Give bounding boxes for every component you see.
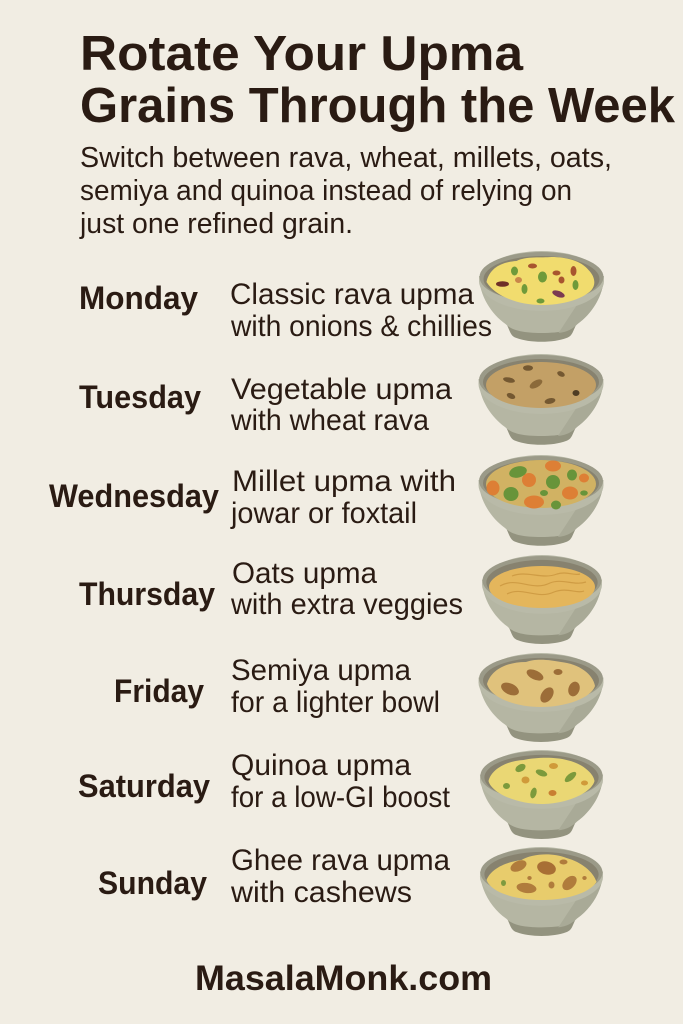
description: Tuesday: Vegetable upma: [231, 373, 452, 406]
description: Thursday: with extra veggies: [230, 588, 463, 621]
day label: Monday: Monday: [79, 280, 198, 316]
description: Wednesday: [230, 465, 456, 530]
row: Saturday: [78, 749, 603, 839]
title: [80, 27, 676, 133]
subtitle: just one refined grain.: [79, 208, 353, 240]
description: Thursday: [230, 557, 463, 621]
row: Friday: [114, 653, 604, 742]
title: Rotate Your Upma: [80, 27, 524, 81]
day label: Friday: Friday: [114, 673, 204, 709]
description: Saturday: Quinoa upma: [231, 749, 411, 782]
description: Saturday: [231, 749, 451, 814]
description: Friday: Semiya upma: [231, 654, 411, 687]
description: Sunday: Ghee rava upma: [231, 844, 450, 877]
subtitle: semiya and quinoa instead of relying on: [80, 175, 572, 207]
day label: Saturday: Saturday: [78, 768, 210, 804]
icon: bowl of wheat rava upma: [478, 354, 604, 445]
description: Saturday: for a low-GI boost: [231, 781, 451, 814]
day label: Sunday: Sunday: [98, 865, 207, 901]
description: Friday: for a lighter bowl: [231, 686, 440, 719]
day label: Tuesday: Tuesday: [79, 379, 201, 415]
subtitle: [79, 142, 612, 240]
icon: bowl of oats upma: [482, 555, 602, 644]
description: Sunday: [230, 844, 450, 909]
description: Friday: [231, 654, 440, 719]
icon: bowl of ghee rava upma with cashews: [480, 847, 603, 936]
row: Sunday: [98, 844, 603, 936]
description: Sunday: with cashews: [230, 876, 412, 909]
description: Tuesday: [230, 373, 452, 437]
row: Thursday: [79, 555, 602, 644]
icon: bowl of semiya upma: [478, 653, 604, 742]
description: Monday: [230, 278, 492, 343]
row: Monday: [79, 251, 604, 343]
day label: Wednesday: Wednesday: [49, 478, 219, 514]
description: Monday: Classic rava upma: [230, 278, 474, 311]
description: Thursday: Oats upma: [232, 557, 377, 590]
description: Wednesday: Millet upma with: [232, 465, 456, 498]
description: Monday: with onions & chillies: [230, 310, 492, 343]
icon: bowl of millet upma: [478, 455, 604, 546]
title: Grains Through the Week: [80, 79, 676, 133]
footer: website: MasalaMonk.com: [195, 959, 492, 998]
day label: Thursday: Thursday: [79, 576, 215, 612]
icon: bowl of classic rava upma: [479, 251, 604, 342]
description: Tuesday: with wheat rava: [230, 404, 429, 437]
row: Wednesday: [49, 455, 604, 546]
description: Wednesday: jowar or foxtail: [230, 497, 417, 530]
row: Tuesday: [79, 354, 604, 445]
subtitle: Switch between rava, wheat, millets, oats,: [80, 142, 612, 174]
icon: bowl of quinoa upma: [480, 750, 603, 839]
